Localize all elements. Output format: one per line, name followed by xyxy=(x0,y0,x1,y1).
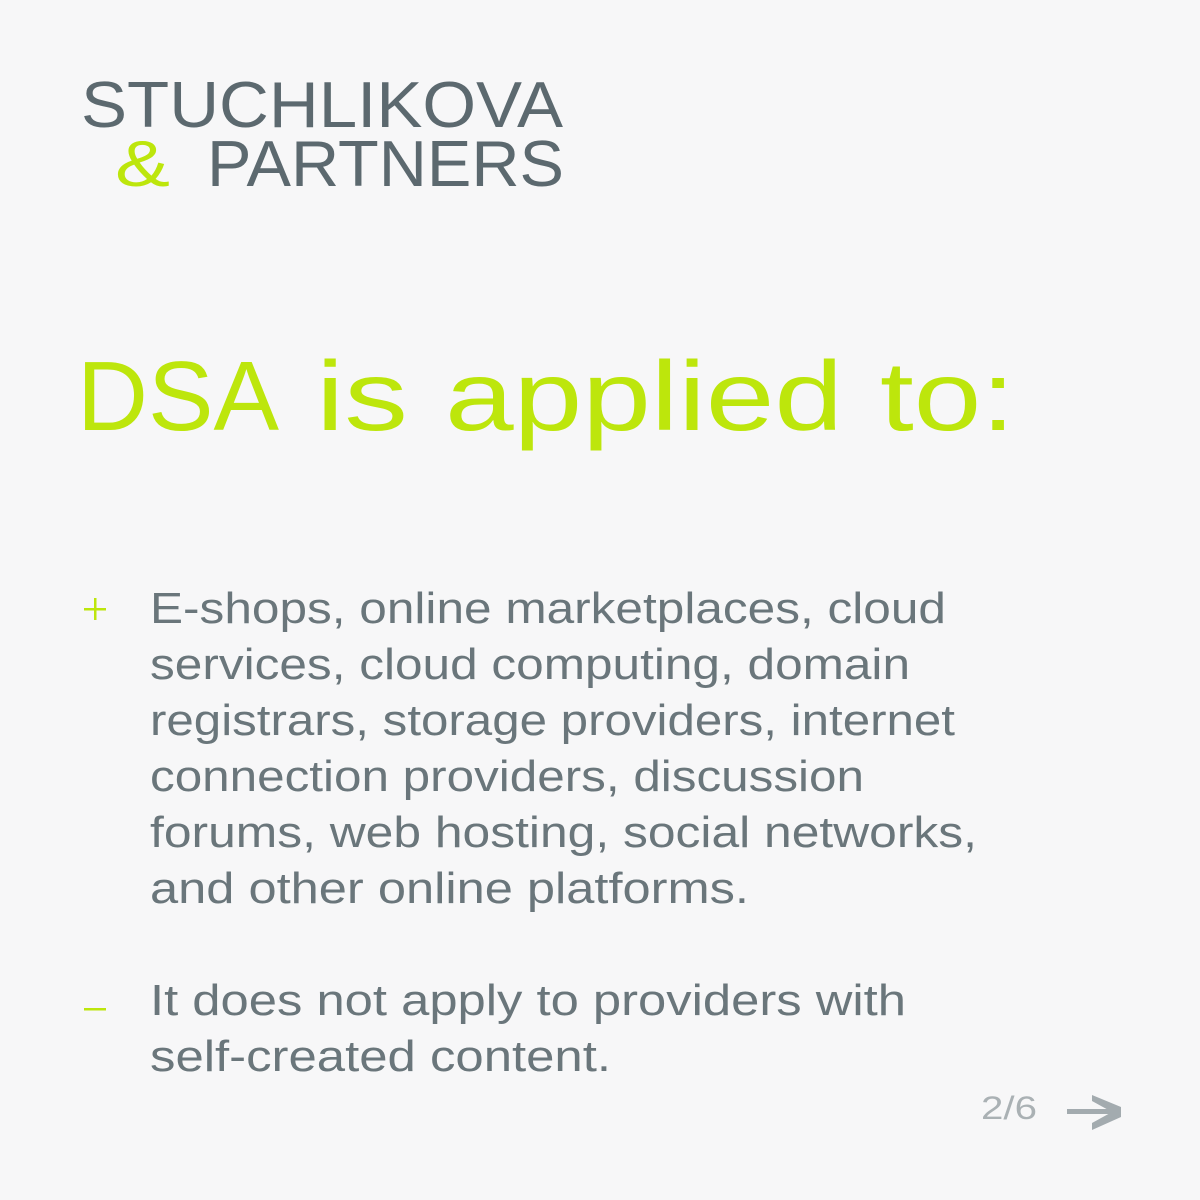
text block: services covered by the DSA: forums, web hosting, social networks, xyxy=(150,808,977,857)
icon: minus bullet xyxy=(84,1008,106,1010)
text block: services covered by the DSA: E-shops, online marketplaces, cloud xyxy=(150,584,946,633)
arrow: next page xyxy=(1067,1095,1121,1130)
text block: exclusions from the DSA xyxy=(150,976,906,1081)
text block: services covered by the DSA: and other online platforms. xyxy=(150,864,749,913)
heading xyxy=(77,341,1015,451)
text block: exclusions from the DSA: It does not apply to providers with xyxy=(150,976,906,1025)
heading: applied xyxy=(445,341,843,451)
text block: services covered by the DSA: services, cloud computing, domain xyxy=(150,640,910,689)
text block: services covered by the DSA: registrars, storage providers, internet xyxy=(150,696,955,745)
text block: services covered by the DSA xyxy=(150,584,977,913)
text block: exclusions from the DSA: self-created content. xyxy=(150,1032,611,1081)
text block: services covered by the DSA: connection providers, discussion xyxy=(150,752,864,801)
logo: Stuchlikova & Partners: STUCHLIKOVA xyxy=(81,68,564,141)
logo: Stuchlikova & Partners: PARTNERS xyxy=(207,127,564,200)
heading: to: xyxy=(880,341,1015,451)
logo: Stuchlikova & Partners xyxy=(81,68,564,200)
logo ampersand: & xyxy=(115,127,170,200)
heading: DSA xyxy=(77,341,280,451)
heading: is xyxy=(316,341,408,451)
page number: 2/6 xyxy=(981,1090,1037,1126)
icon: plus bullet xyxy=(84,598,106,620)
